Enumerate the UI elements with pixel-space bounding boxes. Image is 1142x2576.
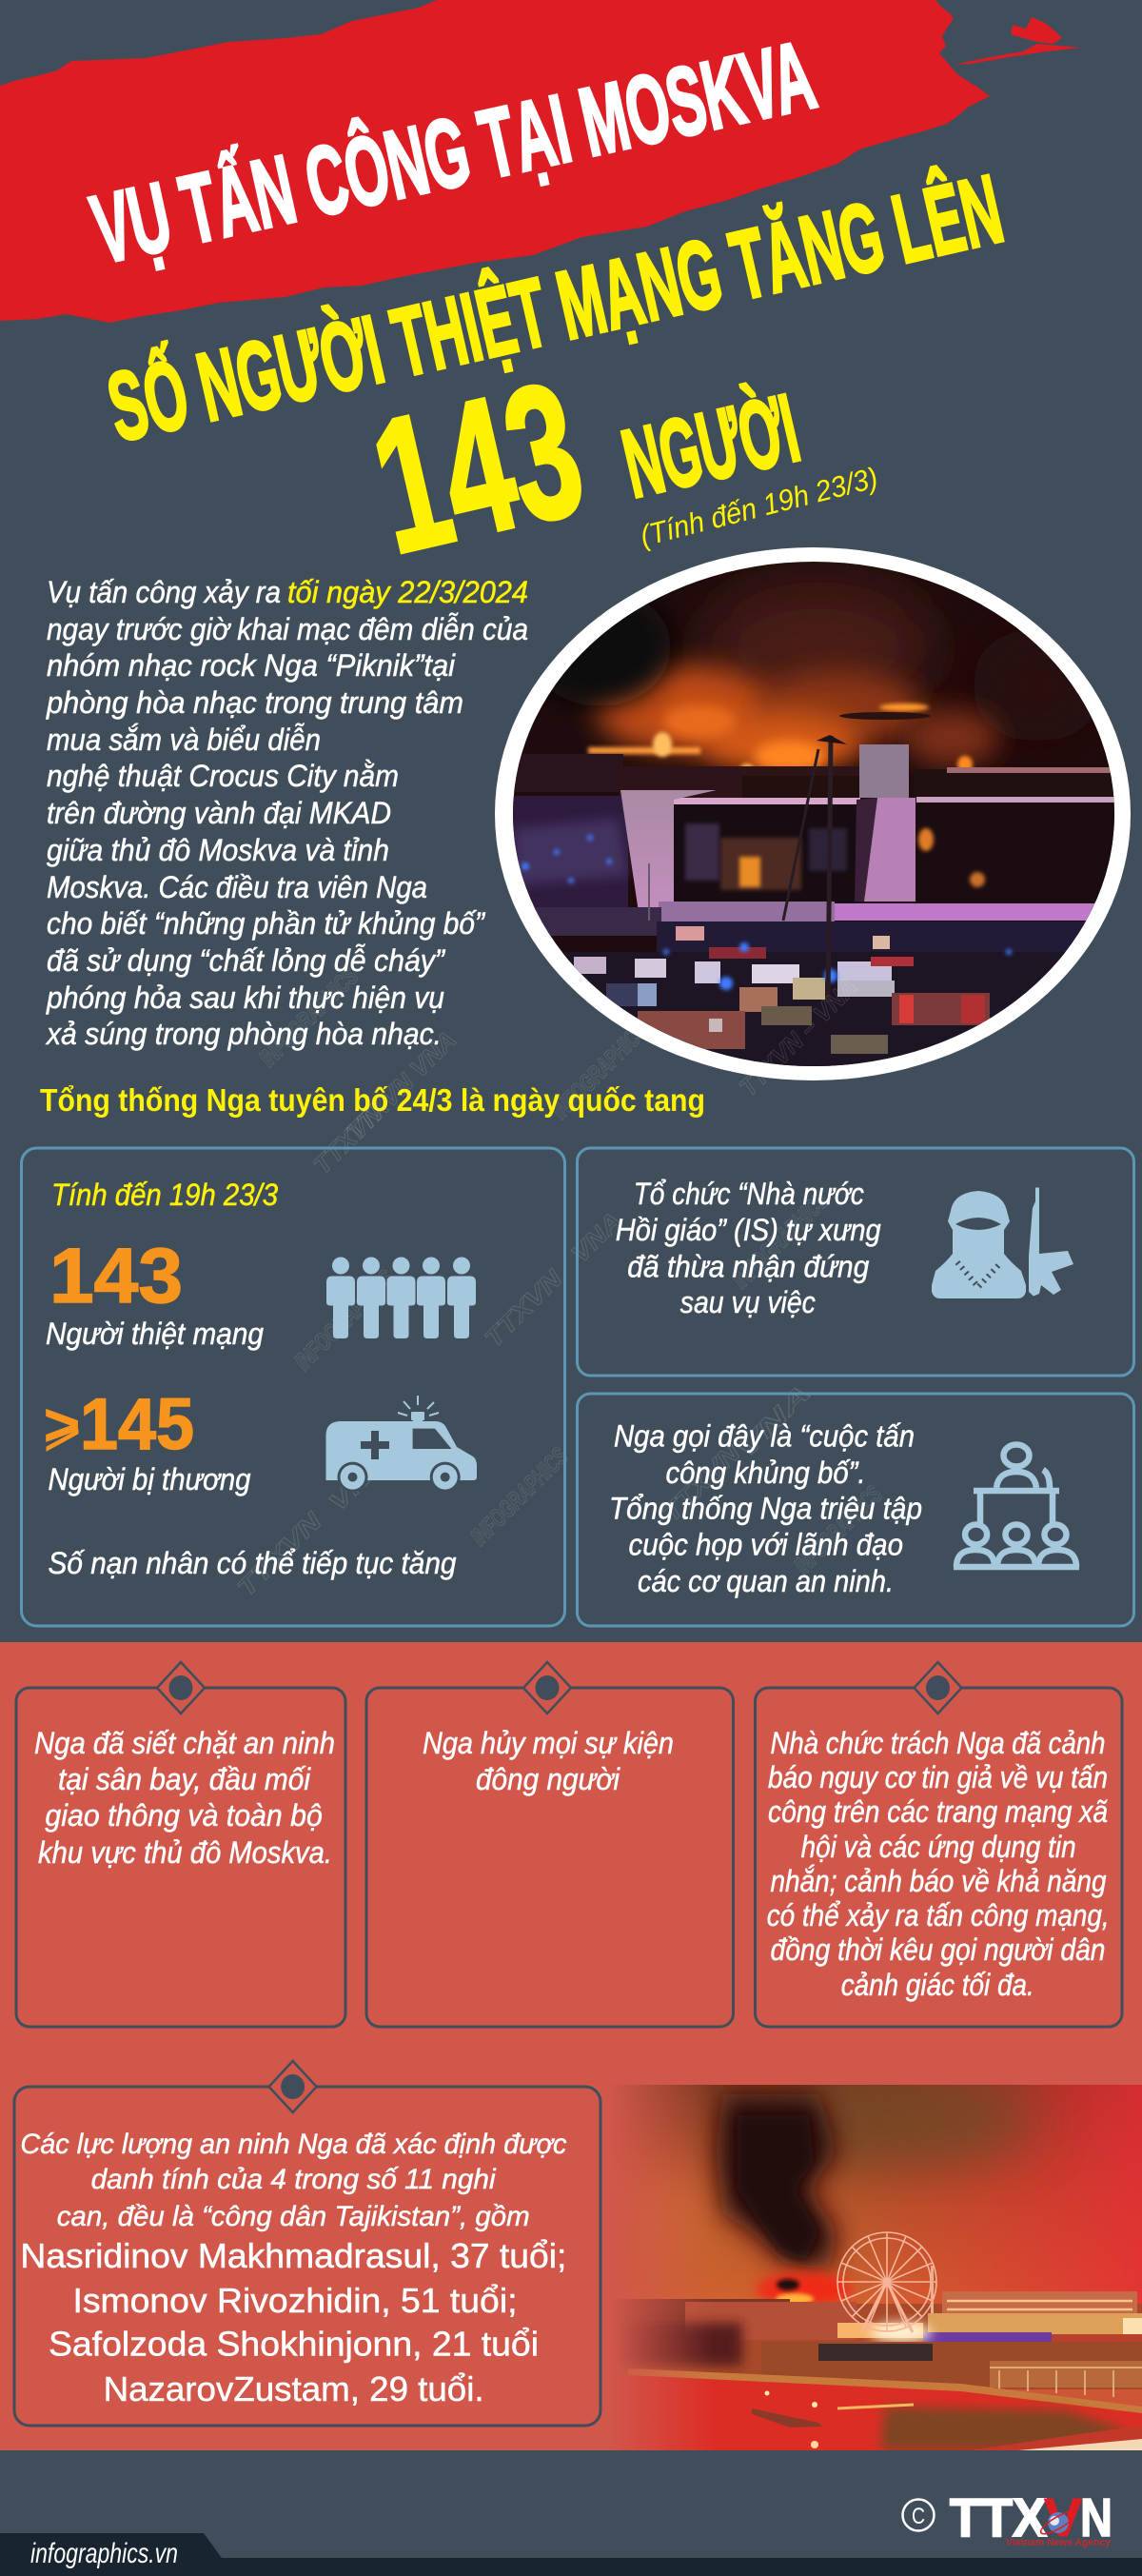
- text: suspects intro: danh tính của 4 trong số 11 nghi: [91, 2164, 497, 2195]
- number: over 145 injured: >: [44, 1393, 80, 1458]
- time note: (Tính đến 19h 23/3): [637, 461, 881, 553]
- logo: TTXVN: N: [1080, 2487, 1112, 2548]
- photo: fire smoke over the city: [590, 2075, 1142, 2450]
- text: suspect names: [20, 2236, 566, 2408]
- text: IS claim: đã thừa nhận đứng: [627, 1249, 869, 1283]
- diamond marker: [523, 1662, 571, 1714]
- text: Russia calls terror attack: các cơ quan an ninh.: [638, 1564, 894, 1598]
- panel: IS claim: [577, 1148, 1134, 1376]
- watermarks: TTXVN: [657, 1437, 746, 1527]
- watermarks: INFOGRAPHICS: [464, 1441, 574, 1551]
- panel: fake news warning: [756, 1662, 1122, 2027]
- note: toll may rise: Số nạn nhân có thể tiếp tục tăng: [48, 1546, 457, 1580]
- watermarks: INFOGRAPHICS: [788, 1479, 888, 1579]
- intro paragraph: nhóm nhạc rock Nga “Piknik”tại: [47, 648, 456, 683]
- icon: masked gunman: [932, 1188, 1073, 1298]
- intro paragraph: tối ngày 22/3/2024: [287, 575, 528, 609]
- text: airport security: [34, 1726, 335, 1870]
- text: fake news warning: hội và các ứng dụng tin: [801, 1830, 1076, 1864]
- watermarks: INFOGRAPHICS: [288, 1264, 401, 1376]
- red brush stroke banner: [0, 0, 1081, 323]
- diamond marker: [157, 1662, 205, 1714]
- watermarks: TTXVN: [307, 1098, 389, 1179]
- watermarks: VNA: [323, 1445, 394, 1516]
- text: fake news warning: [767, 1726, 1110, 2002]
- big number 143: 143: [356, 342, 600, 594]
- red section background: [0, 1642, 1142, 2450]
- text: suspect names: NazarovZustam, 29 tuổi.: [104, 2369, 484, 2408]
- text: Russia calls terror attack: Nga gọi đây là “cuộc tấn: [614, 1418, 915, 1453]
- text: airport security: Nga đã siết chặt an ninh: [34, 1726, 335, 1760]
- intro paragraph: cho biết “những phần tử khủng bố”: [47, 906, 485, 941]
- logo: TTXVN: TTX: [950, 2487, 1047, 2548]
- text: Russia calls terror attack: cuộc họp với lãnh đạo: [628, 1527, 903, 1561]
- text: airport security: khu vực thủ đô Moskva.: [38, 1835, 332, 1870]
- text: airport security: giao thông và toàn bộ: [45, 1798, 323, 1833]
- text: IS claim: Hồi giáo” (IS) tự xưng: [616, 1213, 881, 1247]
- unit: nguoi: NGƯỜI: [613, 373, 808, 518]
- text: IS claim: Tổ chức “Nhà nước: [634, 1177, 864, 1211]
- as-of date: Tính đến 19h 23/3: [51, 1178, 278, 1212]
- text: fake news warning: cảnh giác tối đa.: [841, 1968, 1034, 2002]
- text: IS claim: [616, 1177, 881, 1319]
- intro paragraph: đã sử dụng “chất lỏng dễ cháy”: [47, 943, 445, 978]
- diamond marker: [914, 1662, 961, 1714]
- icon: people: [326, 1257, 476, 1338]
- text: cancelled events: [423, 1726, 674, 1796]
- label: injured: Người bị thương: [48, 1462, 251, 1496]
- watermarks: TTXVN: [231, 1506, 328, 1602]
- watermarks: VNA: [565, 1206, 627, 1268]
- logo: TTXVN: C: [912, 2504, 925, 2529]
- watermarks: TTXVN – VNA: [734, 972, 863, 1101]
- intro paragraph: Vụ tấn công xảy ra: [47, 575, 281, 609]
- label: dead: Người thiệt mạng: [46, 1317, 264, 1351]
- text: suspects intro: Các lực lượng an ninh Nga đã xác định được: [20, 2129, 566, 2160]
- icon: ambulance: [325, 1396, 477, 1493]
- diamond marker: [269, 2061, 317, 2112]
- number: 143 dead: 143: [49, 1233, 183, 1319]
- watermarks: INFOGRAPHICS: [545, 1017, 653, 1124]
- intro paragraph: giữa thủ đô Moskva và tỉnh: [47, 833, 389, 867]
- text: Russia calls terror attack: công khủng bố”.: [666, 1456, 866, 1490]
- text: cancelled events: Nga hủy mọi sự kiện: [423, 1726, 674, 1760]
- watermarks: TTXVN VNA: [341, 1025, 462, 1146]
- panel: security meeting: [577, 1394, 1134, 1626]
- logo: TTXVN: [902, 2487, 1112, 2548]
- panel: casualties: [21, 1148, 565, 1626]
- intro paragraph: mua sắm và biểu diễn: [47, 723, 321, 757]
- text: IS claim: sau vụ việc: [680, 1285, 816, 1319]
- intro paragraph: xả súng trong phòng hòa nhạc.: [45, 1017, 442, 1051]
- watermarks: VNA: [730, 1378, 817, 1464]
- intro paragraph: ngay trước giờ khai mạc đêm diễn của: [47, 612, 528, 646]
- source: infographics.vn: infographics.vn: [30, 2538, 178, 2569]
- intro paragraph: Moskva. Các điều tra viên Nga: [47, 870, 427, 904]
- number: over 145 injured: 145: [80, 1384, 194, 1465]
- logo: TTXVN: V: [1044, 2487, 1082, 2548]
- text: suspect names: Safolzoda Shokhinjonn, 21 tuổi: [49, 2325, 539, 2363]
- watermarks: [231, 961, 888, 1602]
- text: airport security: tại sân bay, đầu mối: [58, 1762, 311, 1796]
- watermarks: TTXVN: [479, 1263, 568, 1353]
- panel: cancelled events: [366, 1662, 733, 2027]
- text: suspects intro: can, đều là “công dân Tajikistan”, gồm: [57, 2201, 530, 2232]
- panel: suspects: [14, 2061, 601, 2426]
- text: suspect names: Ismonov Rivozhidin, 51 tuổi;: [72, 2281, 518, 2320]
- intro paragraph: nghệ thuật Crocus City nằm: [47, 759, 399, 793]
- intro paragraph: phòng hòa nhạc trong trung tâm: [46, 685, 463, 720]
- watermarks: INFOGRAPHICS: [253, 961, 364, 1072]
- intro paragraph: phóng hỏa sau khi thực hiện vụ: [46, 981, 444, 1015]
- intro paragraph: [45, 575, 528, 1051]
- intro paragraph: trên đường vành đại MKAD: [47, 796, 391, 830]
- text: suspects intro: [20, 2129, 566, 2232]
- panel: airport security: [16, 1662, 345, 2027]
- text: cancelled events: đông người: [476, 1762, 620, 1796]
- circular photo: burning Crocus City Hall: [495, 547, 1131, 1080]
- text: suspect names: Nasridinov Makhmadrasul, 37 tuổi;: [20, 2236, 566, 2275]
- logo: TTXVN: Vietnam News Agency: [1006, 2537, 1112, 2548]
- text: Russia calls terror attack: Tổng thống Nga triệu tập: [609, 1492, 922, 1526]
- national mourning line: Tổng thống Nga tuyên bố 24/3 là ngày quốc tang: [40, 1082, 705, 1118]
- text: Russia calls terror attack: [609, 1418, 922, 1598]
- footer bar: [0, 2533, 1142, 2576]
- watermarks: INFOGRAPHICS: [726, 1186, 834, 1294]
- icon: meeting: [954, 1445, 1079, 1567]
- text: fake news warning: đồng thời kêu gọi người dân: [771, 1932, 1106, 1967]
